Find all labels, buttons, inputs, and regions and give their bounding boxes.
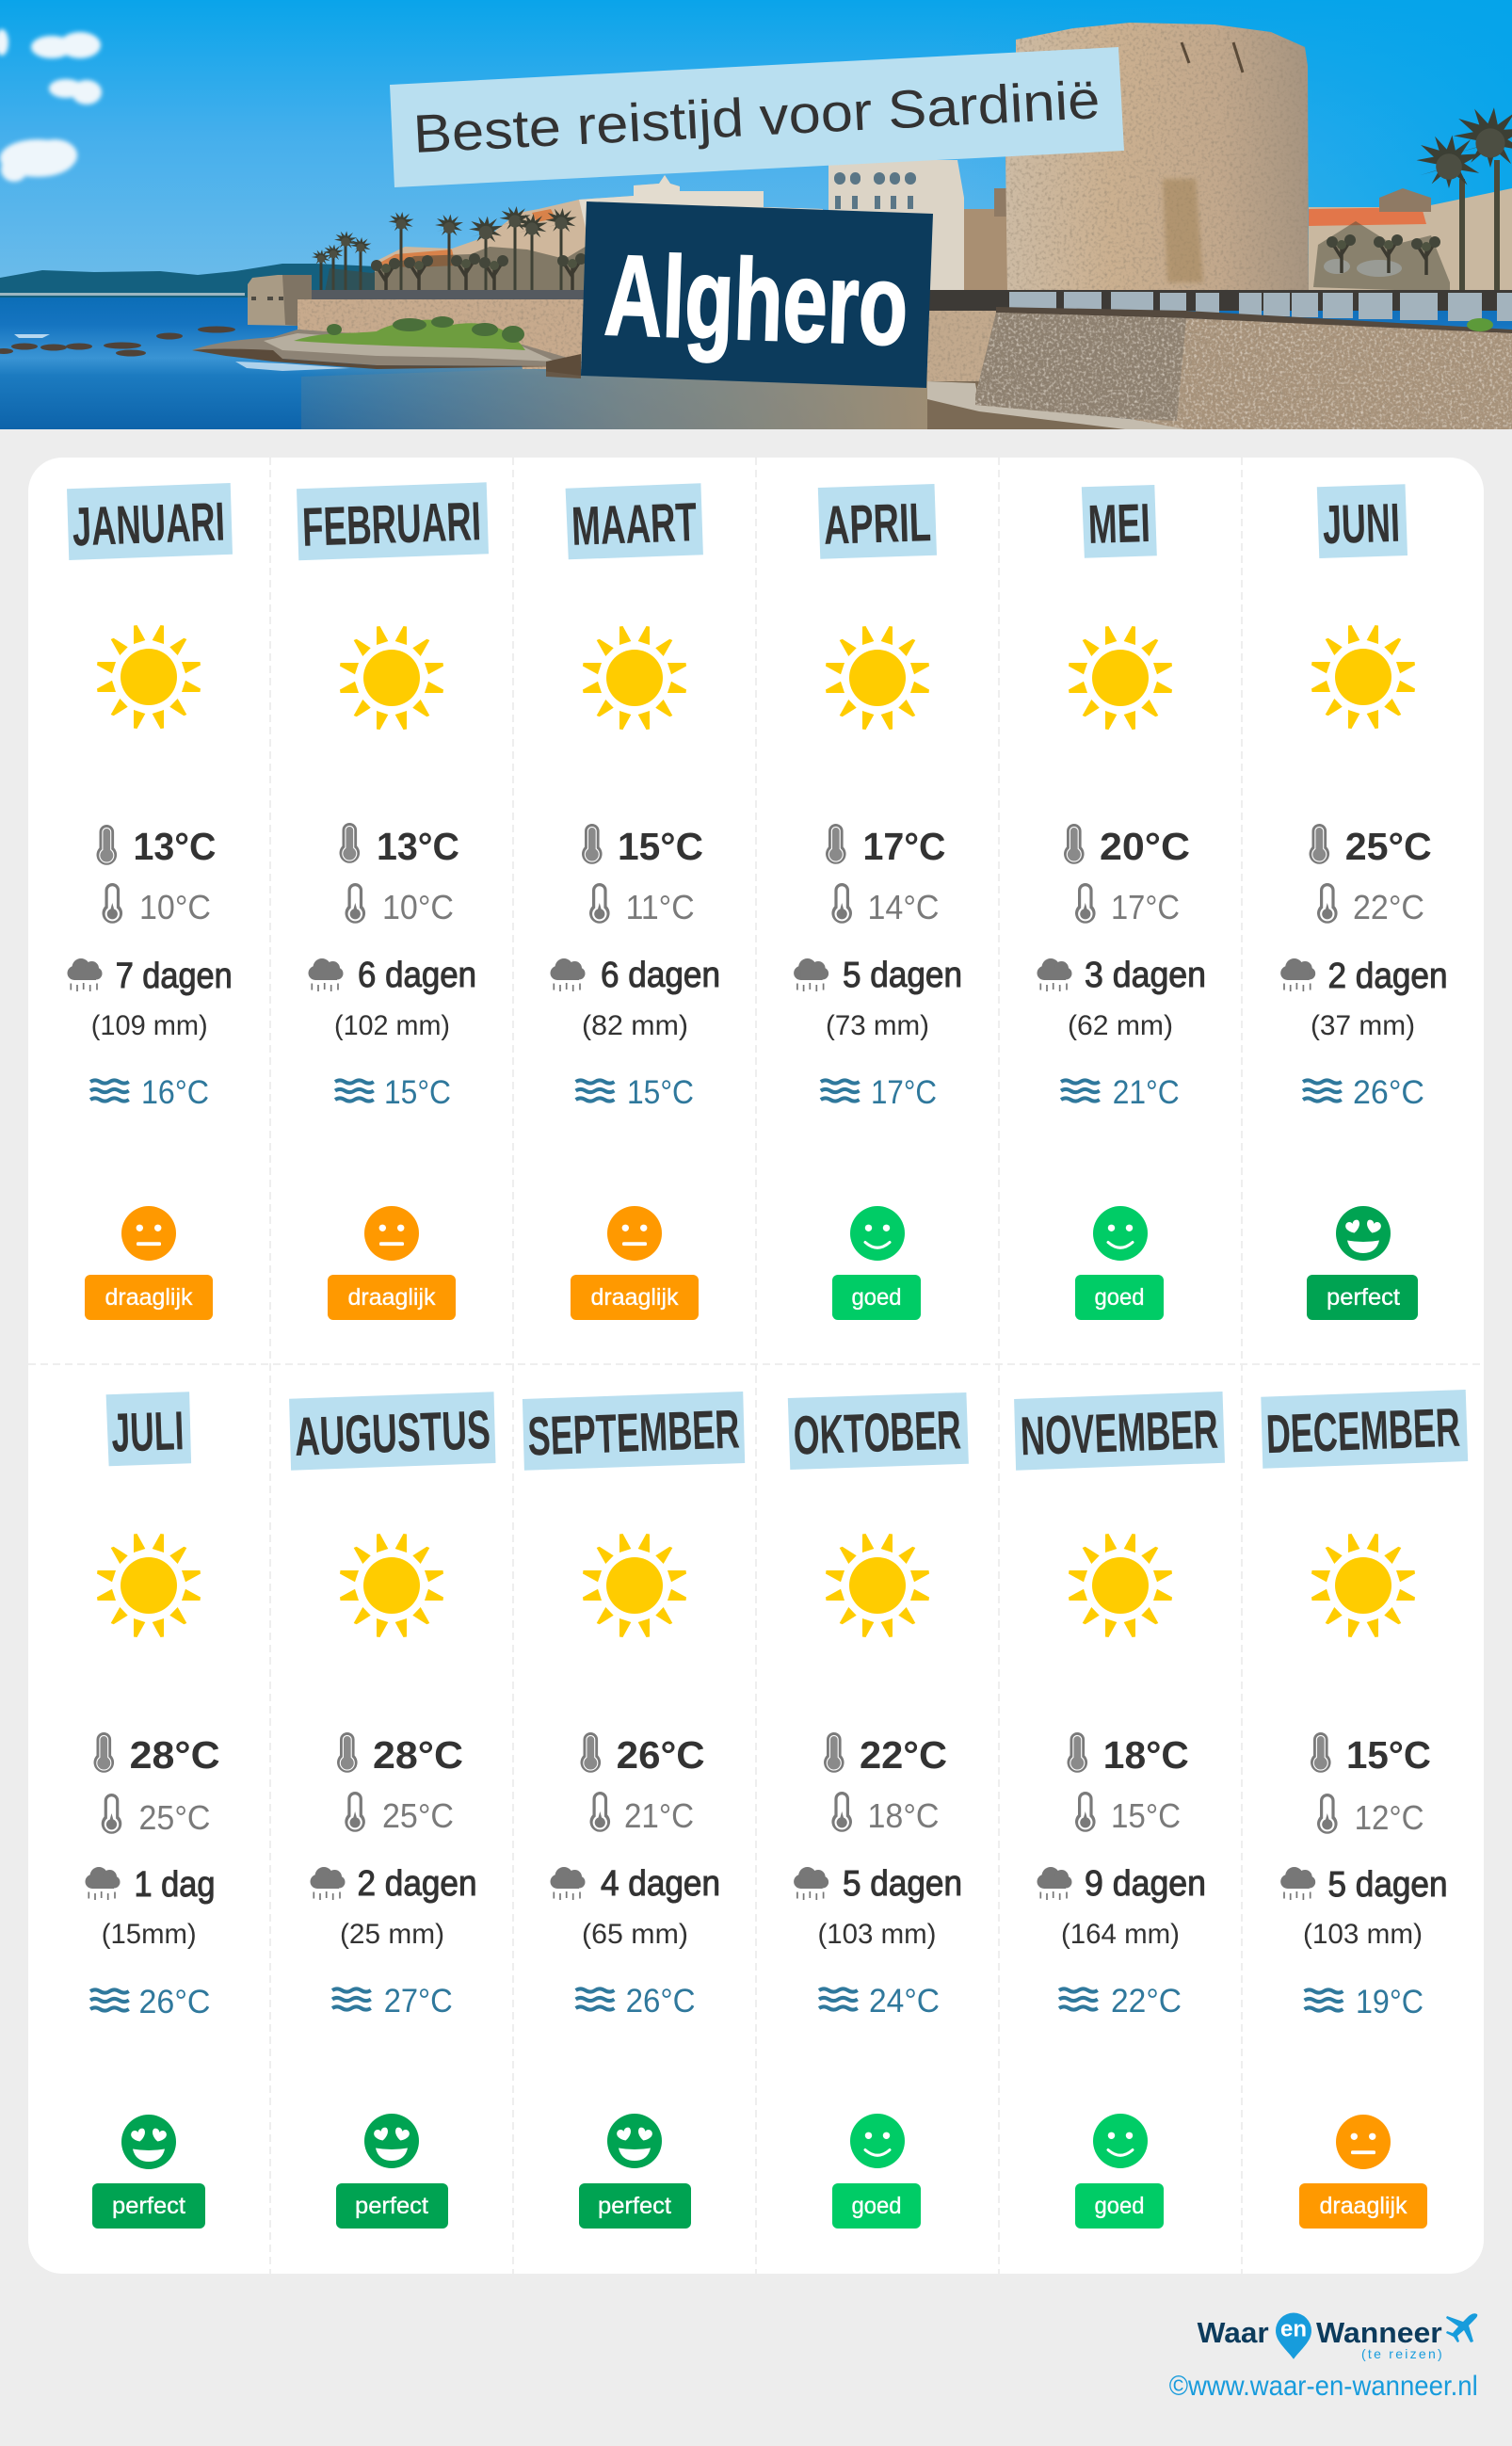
rain days: 2 dagen bbox=[1327, 957, 1448, 996]
sea temperature bbox=[1303, 1074, 1424, 1111]
heading: maart bbox=[566, 483, 703, 559]
icon: sun bbox=[1069, 626, 1172, 730]
sea temperature: 19°C bbox=[1356, 1984, 1424, 2020]
sea temperature bbox=[1059, 1983, 1182, 2020]
column: april bbox=[794, 484, 962, 1320]
rating: perfect: perfect bbox=[1327, 1284, 1400, 1311]
high temperature bbox=[1068, 1732, 1189, 1777]
icon: sun bbox=[826, 626, 929, 730]
rating: goed bbox=[1075, 2114, 1164, 2229]
sea temperature: 22°C bbox=[1111, 1983, 1182, 2020]
high temperature: 28°C bbox=[130, 1733, 220, 1777]
rating: draaglijk bbox=[328, 1206, 456, 1320]
rain days bbox=[1280, 957, 1448, 996]
rain days: 5 dagen bbox=[843, 1864, 962, 1904]
column: november bbox=[1014, 1392, 1225, 2229]
high temperature: 17°C bbox=[862, 825, 945, 868]
rainfall: (109 mm) bbox=[91, 1010, 208, 1041]
low temperature: 17°C bbox=[1111, 888, 1180, 926]
high temperature bbox=[1311, 1732, 1431, 1777]
icon: sun bbox=[583, 626, 686, 730]
high temperature bbox=[824, 1732, 947, 1777]
high temperature: 20°C bbox=[1100, 825, 1190, 868]
rainfall: (164 mm) bbox=[1061, 1919, 1180, 1950]
sea temperature bbox=[821, 1074, 937, 1111]
rain days bbox=[311, 1864, 476, 1904]
rating: draaglijk bbox=[85, 1206, 213, 1320]
rain days: 9 dagen bbox=[1085, 1864, 1206, 1904]
low temperature bbox=[1317, 1794, 1424, 1837]
heading: juli bbox=[106, 1392, 191, 1466]
rating: draaglijk: draaglijk bbox=[105, 1284, 193, 1311]
logo: Waar en Wanneer: (te reizen) bbox=[1361, 2346, 1442, 2361]
heading: juni bbox=[1317, 484, 1407, 558]
logo: Waar en Wanneer bbox=[1198, 2312, 1477, 2361]
rating: draaglijk: draaglijk bbox=[348, 1284, 436, 1311]
sea temperature: 15°C bbox=[384, 1074, 451, 1111]
rain days bbox=[1037, 1864, 1206, 1904]
heading: mei bbox=[1082, 485, 1157, 558]
heading: mei: MEI bbox=[1087, 492, 1151, 555]
sea temperature: 21°C bbox=[1113, 1074, 1180, 1111]
low temperature: 11°C bbox=[626, 888, 695, 926]
heading: november bbox=[1014, 1392, 1225, 1471]
sea temperature: 26°C bbox=[626, 1983, 696, 2020]
sea temperature: 24°C bbox=[869, 1983, 940, 2020]
icon: sun bbox=[1311, 1534, 1415, 1637]
low temperature bbox=[1317, 883, 1424, 926]
rating: draaglijk bbox=[571, 1206, 699, 1320]
rain days: 6 dagen bbox=[358, 956, 476, 995]
rain days: 2 dagen bbox=[358, 1864, 476, 1904]
sea temperature bbox=[335, 1074, 451, 1111]
heading: april bbox=[818, 484, 937, 559]
rain days bbox=[85, 1865, 215, 1905]
rating: perfect bbox=[1307, 1206, 1418, 1320]
high temperature bbox=[96, 825, 217, 868]
low temperature: 25°C bbox=[139, 1798, 211, 1837]
high temperature: 28°C bbox=[373, 1733, 463, 1777]
low temperature bbox=[1075, 1792, 1181, 1835]
high temperature: 15°C bbox=[1346, 1733, 1431, 1777]
high temperature: 13°C bbox=[377, 825, 459, 868]
sea temperature: 26°C bbox=[1353, 1074, 1424, 1111]
rating: goed: goed bbox=[1094, 2193, 1145, 2219]
icon: sun bbox=[1069, 1534, 1172, 1637]
heading: maart: MAART bbox=[571, 491, 698, 557]
heading: april: APRIL bbox=[823, 491, 932, 556]
low temperature: 15°C bbox=[1111, 1796, 1181, 1835]
subtitle banner: Beste reistijd voor Sardinië bbox=[411, 70, 1102, 165]
rating: draaglijk: draaglijk bbox=[591, 1284, 679, 1311]
rating: goed bbox=[1075, 1206, 1164, 1320]
heading: augustus bbox=[289, 1392, 495, 1471]
rain days bbox=[309, 956, 476, 995]
rain days bbox=[550, 956, 720, 995]
rainfall: (25 mm) bbox=[340, 1919, 444, 1950]
sea temperature bbox=[576, 1074, 694, 1111]
high temperature bbox=[826, 824, 945, 868]
low temperature: 12°C bbox=[1355, 1798, 1424, 1837]
rating: draaglijk bbox=[1299, 2115, 1427, 2229]
rating: perfect bbox=[579, 2114, 691, 2229]
heading: juni: JUNI bbox=[1322, 492, 1401, 555]
rain days: 6 dagen bbox=[601, 956, 720, 995]
rain days bbox=[794, 956, 962, 995]
icon: airplane bbox=[1446, 2313, 1477, 2342]
sea temperature: 27°C bbox=[384, 1983, 453, 2020]
low temperature bbox=[831, 883, 940, 926]
sea temperature: 26°C bbox=[139, 1984, 211, 2020]
icon: sun bbox=[1311, 625, 1415, 729]
high temperature: 25°C bbox=[1345, 825, 1432, 868]
low temperature bbox=[102, 883, 211, 926]
icon: map pin bbox=[1276, 2312, 1311, 2359]
low temperature bbox=[831, 1792, 940, 1835]
sea temperature bbox=[90, 1074, 209, 1111]
rain days: 5 dagen bbox=[843, 956, 962, 995]
sea temperature bbox=[819, 1983, 940, 2020]
icon: sun bbox=[97, 625, 201, 729]
heading: november: NOVEMBER bbox=[1020, 1399, 1219, 1467]
rain days: 1 dag bbox=[134, 1865, 215, 1905]
logo: Waar en Wanneer: Wanneer bbox=[1316, 2316, 1442, 2349]
low temperature: 10°C bbox=[382, 888, 454, 926]
rain days: 3 dagen bbox=[1085, 956, 1206, 995]
rating: perfect: perfect bbox=[355, 2193, 428, 2219]
rainfall: (102 mm) bbox=[334, 1010, 450, 1041]
rainfall: (103 mm) bbox=[817, 1919, 936, 1950]
rainfall: (62 mm) bbox=[1068, 1010, 1173, 1041]
high temperature: 26°C bbox=[617, 1733, 705, 1777]
sea temperature bbox=[332, 1983, 453, 2020]
rating: goed: goed bbox=[851, 1284, 902, 1311]
rating: draaglijk: draaglijk bbox=[1320, 2193, 1407, 2219]
sea temperature: 17°C bbox=[871, 1074, 937, 1111]
sea temperature bbox=[90, 1984, 211, 2020]
rain days bbox=[550, 1864, 720, 1904]
column: juli bbox=[85, 1392, 220, 2229]
high temperature: 22°C bbox=[860, 1733, 947, 1777]
rain days: 5 dagen bbox=[1327, 1865, 1448, 1905]
rating: perfect bbox=[92, 2115, 205, 2229]
panel: climate table bbox=[28, 458, 1484, 2274]
sea temperature bbox=[1305, 1984, 1424, 2020]
column: juni bbox=[1280, 484, 1448, 1320]
sea temperature: 16°C bbox=[141, 1074, 209, 1111]
high temperature bbox=[1064, 824, 1190, 868]
low temperature: 25°C bbox=[382, 1796, 454, 1835]
low temperature: 21°C bbox=[624, 1796, 694, 1835]
icon: sun bbox=[583, 1534, 686, 1637]
rain days bbox=[794, 1864, 962, 1904]
subtitle banner bbox=[390, 47, 1124, 187]
rain days: 4 dagen bbox=[601, 1864, 720, 1904]
logo: Waar en Wanneer: Waar bbox=[1198, 2316, 1269, 2349]
icon: sun bbox=[97, 1534, 201, 1637]
heading: juli: JULI bbox=[110, 1400, 185, 1464]
heading: september bbox=[523, 1392, 745, 1471]
rainfall: (65 mm) bbox=[582, 1919, 688, 1950]
high temperature bbox=[339, 823, 459, 868]
rain days bbox=[68, 957, 233, 996]
low temperature: 14°C bbox=[868, 888, 940, 926]
low temperature bbox=[102, 1794, 211, 1837]
heading: januari: JANUARI bbox=[72, 491, 226, 557]
header photo: Alghero coast and tower bbox=[0, 0, 1512, 429]
rainfall: (103 mm) bbox=[1303, 1919, 1423, 1950]
column: maart bbox=[550, 483, 720, 1320]
column: oktober bbox=[788, 1392, 969, 2229]
title banner: Alghero bbox=[581, 201, 933, 388]
low temperature bbox=[1075, 883, 1180, 926]
heading: februari bbox=[297, 482, 489, 560]
icon: sun bbox=[340, 626, 443, 730]
high temperature bbox=[1309, 824, 1432, 868]
high temperature bbox=[580, 1732, 705, 1777]
high temperature bbox=[337, 1732, 463, 1777]
low temperature: 10°C bbox=[139, 888, 211, 926]
footer url: ©www.waar-en-wanneer.nl bbox=[1169, 2371, 1478, 2402]
sea temperature bbox=[576, 1983, 696, 2020]
rating: goed bbox=[832, 1206, 921, 1320]
heading: januari bbox=[67, 483, 233, 560]
rating: perfect: perfect bbox=[112, 2193, 185, 2219]
rating: perfect bbox=[336, 2114, 448, 2229]
low temperature bbox=[345, 1792, 454, 1835]
low temperature: 22°C bbox=[1353, 888, 1424, 926]
heading: oktober bbox=[788, 1392, 969, 1470]
high temperature: 15°C bbox=[618, 825, 703, 868]
low temperature bbox=[589, 1792, 694, 1835]
rating: perfect: perfect bbox=[598, 2193, 671, 2219]
column: augustus bbox=[289, 1392, 495, 2229]
rating: goed: goed bbox=[1094, 1284, 1145, 1311]
column: september bbox=[523, 1392, 745, 2229]
column: februari bbox=[297, 482, 489, 1320]
high temperature bbox=[94, 1732, 220, 1777]
sea temperature: 15°C bbox=[627, 1074, 694, 1111]
low temperature bbox=[345, 883, 454, 926]
rating: goed bbox=[832, 2114, 921, 2229]
rain days bbox=[1037, 956, 1206, 995]
heading: augustus: AUGUSTUS bbox=[294, 1399, 491, 1468]
high temperature: 13°C bbox=[134, 825, 217, 868]
low temperature: 18°C bbox=[868, 1796, 940, 1835]
rainfall: (37 mm) bbox=[1311, 1010, 1415, 1041]
heading: oktober: OKTOBER bbox=[793, 1399, 962, 1467]
low temperature bbox=[589, 883, 695, 926]
high temperature bbox=[582, 824, 703, 868]
rainfall: (15mm) bbox=[102, 1919, 197, 1950]
column: mei bbox=[1037, 485, 1206, 1320]
rainfall: (82 mm) bbox=[582, 1010, 688, 1041]
rain days: 7 dagen bbox=[116, 957, 233, 996]
rainfall: (73 mm) bbox=[826, 1010, 929, 1041]
icon: sun bbox=[826, 1534, 929, 1637]
rating: goed: goed bbox=[851, 2193, 902, 2219]
column: januari bbox=[67, 483, 233, 1320]
icon: sun bbox=[340, 1534, 443, 1637]
rain days bbox=[1280, 1865, 1448, 1905]
column: december bbox=[1261, 1390, 1468, 2229]
high temperature: 18°C bbox=[1103, 1733, 1189, 1777]
sea temperature bbox=[1061, 1074, 1180, 1111]
heading: februari: FEBRUARI bbox=[301, 491, 482, 558]
heading: september: SEPTEMBER bbox=[526, 1398, 741, 1468]
icon: map pin: en bbox=[1280, 2317, 1307, 2342]
title banner: Alghero: Alghero bbox=[603, 231, 910, 369]
